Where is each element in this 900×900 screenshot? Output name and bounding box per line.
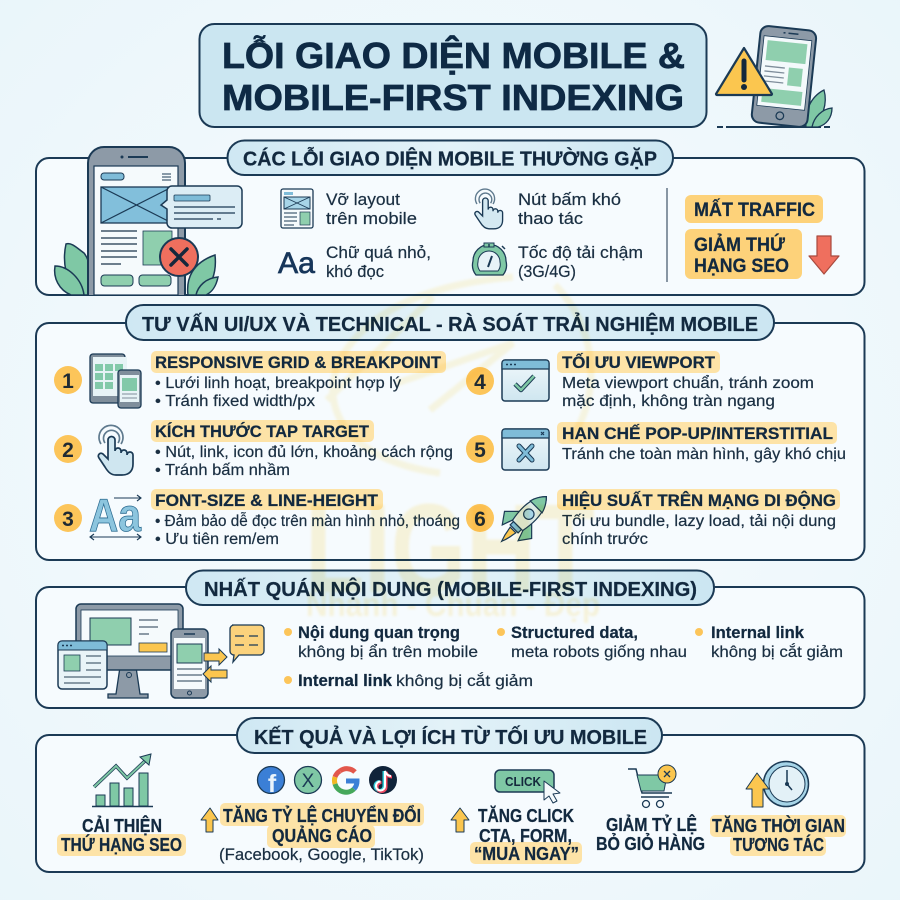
item 2: tap target: • Tránh bấm nhầm [155, 462, 290, 479]
icon: X: X [302, 771, 315, 792]
icon: Google [334, 769, 357, 792]
item 2: tap target: 2 [62, 439, 74, 462]
section heading: NHẤT QUÁN NỘI DUNG (MOBILE-FIRST INDEXING) [204, 577, 697, 601]
illustration: devices [58, 604, 264, 698]
benefit: SEO ranking [57, 754, 186, 856]
item: broken layout: trên mobile [326, 210, 417, 228]
section heading: TƯ VẤN UI/UX VÀ TECHNICAL - RÀ SOÁT TRẢI NGHIỆM MOBILE [142, 312, 758, 336]
icon: Facebook [258, 766, 284, 798]
watermark: Light logo: LIGHT [305, 478, 595, 619]
item 3: font size [54, 489, 460, 548]
item 3: font size: • Đảm bảo dễ đọc trên màn hình nhỏ, thoáng [155, 513, 460, 530]
icon: red down arrow [809, 236, 839, 274]
bullet: internal link inline: Internal link [298, 672, 393, 690]
section heading [228, 140, 673, 175]
item: small text: Chữ quá nhỏ, [326, 244, 431, 262]
icon: up arrow [451, 808, 469, 832]
item: small text: Aa [278, 247, 315, 280]
section heading: CÁC LỖI GIAO DIỆN MOBILE THƯỜNG GẶP [243, 146, 657, 170]
item 4: viewport [466, 351, 814, 410]
item 2: tap target: KÍCH THƯỚC TAP TARGET [155, 422, 370, 441]
benefit: cart abandonment: GIẢM TỶ LỆ [606, 814, 697, 835]
panel: UI/UX and technical review [36, 305, 864, 560]
item 6: mobile network performance: Tối ưu bundle, lazy load, tải nội dung [562, 513, 836, 530]
item 5: pop-up: Tránh che toàn màn hình, gây khó chịu [562, 446, 846, 463]
callout: lost traffic: MẤT TRAFFIC [694, 199, 815, 221]
item 1: responsive grid: RESPONSIVE GRID & BREAKPOINT [155, 353, 442, 372]
callout: lower SEO rank [685, 229, 802, 279]
bullet: structured data: Structured data, [511, 624, 638, 642]
item 4: viewport: mặc định, không tràn ngang [562, 393, 775, 410]
benefit: interaction time [710, 762, 846, 856]
item 3: font size: Aa [89, 489, 141, 541]
item: small text: khó đọc [326, 263, 384, 281]
item: slow loading [472, 243, 643, 281]
item: hard to tap buttons [475, 189, 621, 229]
section heading [237, 718, 662, 753]
benefit: ad conversion: (Facebook, Google, TikTok) [219, 846, 424, 864]
item: broken layout: Vỡ layout [326, 191, 400, 209]
benefit: SEO ranking: CẢI THIỆN [82, 815, 162, 836]
section heading [186, 570, 714, 605]
item 1: responsive grid: • Lưới linh hoạt, breakpoint hợp lý [155, 375, 401, 392]
benefit: interaction time: TĂNG THỜI GIAN [712, 815, 845, 836]
bullet: internal link inline: không bị cắt giảm [396, 671, 533, 690]
bullet: internal link: không bị cắt giảm [711, 642, 843, 661]
callout: lower SEO rank: HẠNG SEO [694, 256, 789, 277]
panel: content consistency [36, 570, 864, 708]
item 5: pop-up [466, 422, 846, 470]
item 1: responsive grid: 1 [62, 370, 74, 393]
item 4: viewport: 4 [474, 371, 486, 394]
callout: lost traffic [685, 195, 823, 223]
item 3: font size: • Ưu tiên rem/em [155, 531, 279, 548]
section heading [126, 305, 774, 340]
item 6: mobile network performance: HIỆU SUẤT TRÊN MẠNG DI ĐỘNG [562, 491, 836, 510]
watermark: Light logo: Nhanh - Chuẩn - Đẹp [306, 586, 600, 624]
item 2: tap target [54, 420, 453, 479]
bullet: important content: Nội dung quan trọng [298, 624, 460, 642]
item 5: pop-up: 5 [474, 439, 486, 462]
item 2: tap target: • Nút, link, icon đủ lớn, khoảng cách rộng [155, 444, 453, 461]
benefit: cart abandonment [596, 765, 705, 854]
panel: common mobile errors [36, 140, 864, 295]
icon: up arrow [201, 808, 218, 832]
benefit: more clicks: CLICK [505, 774, 542, 789]
icon: phone with warning [716, 25, 832, 128]
panel frame [36, 735, 864, 872]
benefit: ad conversion [201, 766, 424, 864]
bullet: structured data [497, 624, 687, 661]
callout: lower SEO rank: GIẢM THỨ [694, 234, 785, 256]
panel frame [36, 323, 864, 560]
item 3: font size: 3 [62, 508, 74, 531]
item 3: font size: FONT-SIZE & LINE-HEIGHT [155, 491, 379, 510]
title: LỖI GIAO DIỆN MOBILE & [222, 34, 685, 76]
item 4: viewport: Meta viewport chuẩn, tránh zoom [562, 375, 814, 392]
item: slow loading: Tốc độ tải chậm [518, 244, 643, 262]
item 6: mobile network performance: chính trước [562, 531, 648, 548]
item 1: responsive grid: • Tránh fixed width/px [155, 393, 315, 410]
icon: X [294, 766, 322, 794]
benefit: cart abandonment: BỎ GIỎ HÀNG [596, 833, 705, 854]
bullet: internal link: Internal link [711, 624, 805, 642]
illustration: broken phone [55, 147, 242, 295]
item: hard to tap buttons: Nút bấm khó [518, 191, 621, 209]
bullet: internal link [695, 624, 843, 661]
benefit: SEO ranking: THỨ HẠNG SEO [61, 834, 182, 855]
item 6: mobile network performance [466, 483, 840, 555]
icon: Facebook: f [268, 770, 277, 798]
item: hard to tap buttons: thao tác [518, 210, 583, 228]
bullet: important content: không bị ẩn trên mobile [298, 643, 478, 661]
panel frame [36, 587, 864, 708]
bullet: structured data: meta robots giống nhau [511, 644, 687, 661]
item: slow loading: (3G/4G) [518, 263, 576, 281]
benefit: ad conversion: TĂNG TỶ LỆ CHUYỂN ĐỔI [223, 805, 421, 826]
item: broken layout [281, 189, 417, 228]
benefit: more clicks [451, 770, 582, 864]
panel frame [36, 158, 864, 295]
benefit: more clicks: “MUA NGAY” [474, 844, 579, 864]
bullet: important content [284, 624, 478, 661]
section heading: KẾT QUẢ VÀ LỢI ÍCH TỪ TỐI ƯU MOBILE [254, 725, 647, 749]
benefit: more clicks: TĂNG CLICK [478, 805, 574, 826]
panel: results and benefits [36, 718, 864, 872]
item 4: viewport: TỐI ƯU VIEWPORT [562, 352, 716, 372]
watermark: Light logo [305, 277, 600, 624]
benefit: more clicks: CTA, FORM, [479, 826, 572, 846]
bullet: internal link inline [284, 671, 533, 690]
title [200, 24, 706, 127]
item: small text [278, 244, 431, 281]
benefit: ad conversion: QUẢNG CÁO [272, 825, 372, 846]
title: MOBILE-FIRST INDEXING [222, 77, 684, 118]
item 5: pop-up: HẠN CHẾ POP-UP/INTERSTITIAL [562, 424, 833, 443]
item 6: mobile network performance: 6 [474, 508, 486, 531]
benefit: interaction time: TƯƠNG TÁC [733, 834, 824, 855]
icon: TikTok [369, 766, 397, 794]
item 1: responsive grid [54, 351, 446, 410]
